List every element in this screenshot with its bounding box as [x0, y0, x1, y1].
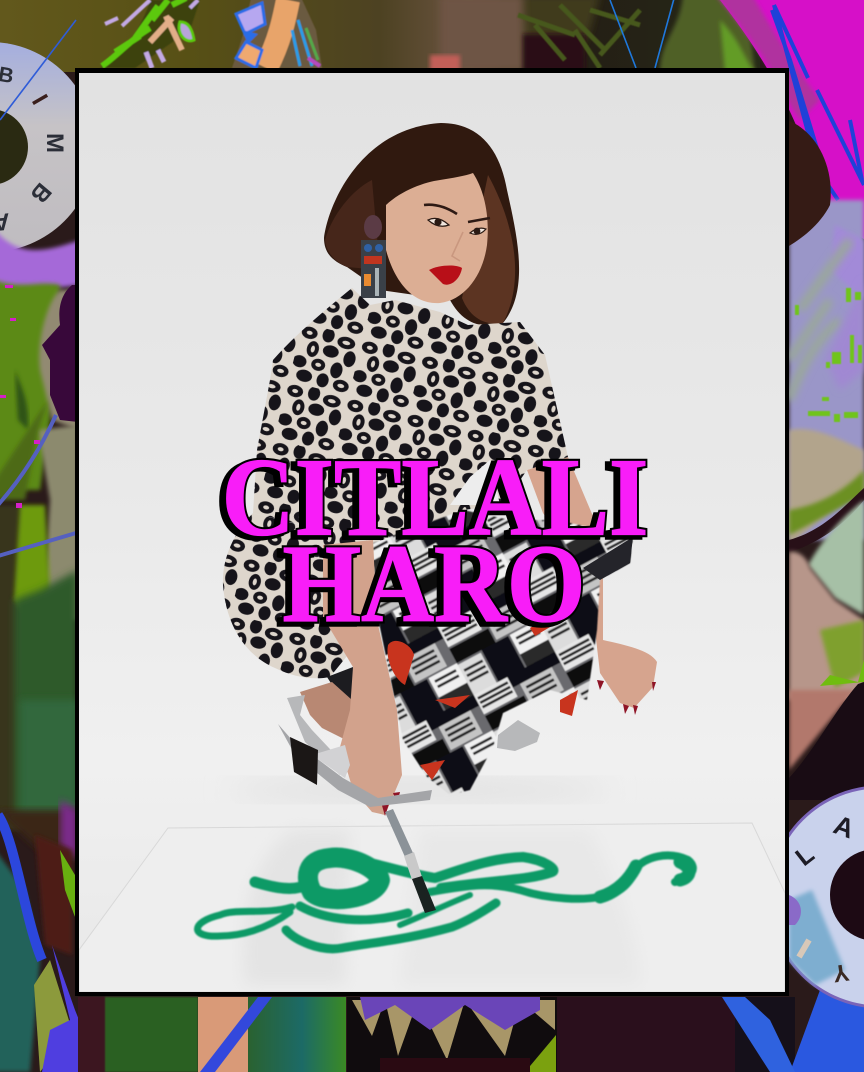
- record disc, top left: B: [25, 177, 57, 208]
- eyes: [428, 218, 486, 234]
- record disc, bottom right: [722, 787, 864, 1072]
- record disc, top left: [0, 20, 95, 252]
- paintbrush: [385, 809, 436, 913]
- floor shadow: [318, 781, 529, 798]
- lips: [429, 266, 462, 285]
- eyebrows: [424, 205, 490, 222]
- leopard trousers: [223, 513, 380, 678]
- nose shadow: [452, 232, 463, 261]
- record disc, top left: M: [41, 133, 68, 153]
- photograph: [79, 123, 785, 992]
- painted portrait, right column: [787, 120, 864, 800]
- leopard blouse: [253, 288, 568, 545]
- magenta and blue strokes, top right: [716, 0, 864, 245]
- title lettering: CITLALI: [222, 435, 648, 559]
- title shadow: HARO: [278, 525, 580, 648]
- painted strokes, bottom band: [78, 997, 795, 1072]
- hair: [324, 123, 519, 325]
- left arm with hand: [323, 540, 402, 815]
- face: [386, 173, 488, 303]
- top band painting: [0, 0, 760, 72]
- title shadow: CITLALI: [217, 438, 643, 561]
- record disc, bottom right: A: [830, 810, 858, 844]
- title lettering: HARO: [283, 522, 585, 645]
- title heavy fill: HARO: [283, 522, 585, 645]
- record disc, bottom right: Y: [831, 958, 851, 987]
- photo frame: [75, 68, 789, 996]
- title heavy fill: [222, 435, 648, 645]
- sandal, near: [278, 695, 432, 807]
- figure: crouching woman: [198, 123, 693, 949]
- earring: [361, 215, 386, 298]
- title heavy fill: CITLALI: [222, 435, 648, 559]
- record disc, top left: I: [26, 90, 53, 109]
- patterned skirt: [373, 510, 633, 795]
- title: [217, 435, 648, 648]
- white gap between arm and torso: [450, 460, 500, 505]
- painted figure, left column: [0, 230, 100, 1072]
- sandal, far: [497, 720, 540, 751]
- title lettering: [222, 435, 648, 645]
- record disc, bottom right: L: [790, 840, 820, 872]
- lower leg: [300, 682, 352, 742]
- green paint stroke: [198, 855, 693, 949]
- title shadow: [217, 438, 643, 648]
- right arm and hand: [527, 457, 657, 708]
- glass sheet: [79, 823, 785, 992]
- flowers at the top edge: [100, 0, 322, 68]
